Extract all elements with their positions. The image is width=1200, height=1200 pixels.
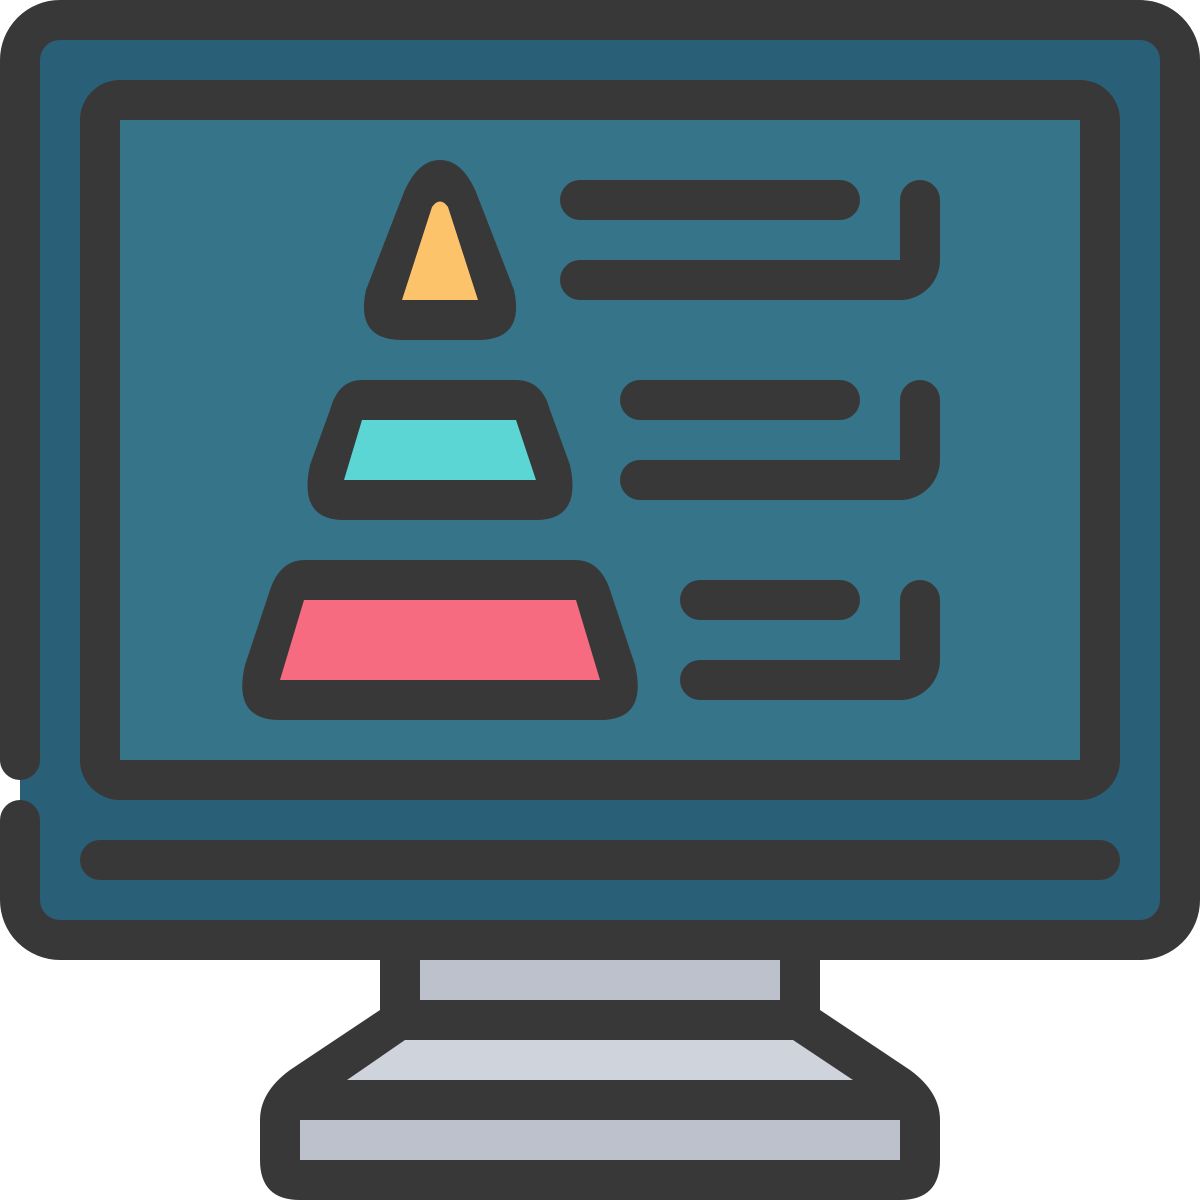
legend lines top [580,200,920,280]
pyramid bottom level (pink) [242,560,638,720]
stand base [260,1010,940,1200]
pyramid middle level (teal) [308,380,572,520]
screen [100,100,1100,780]
monitor bottom bar line [100,840,1100,880]
pyramid top level (yellow) [364,160,516,340]
monitor frame [20,20,1180,940]
legend lines middle [640,400,920,480]
stand neck [380,940,820,1030]
text lines for legend [580,200,920,680]
pyramid chart [242,160,638,720]
legend lines bottom [700,600,920,680]
